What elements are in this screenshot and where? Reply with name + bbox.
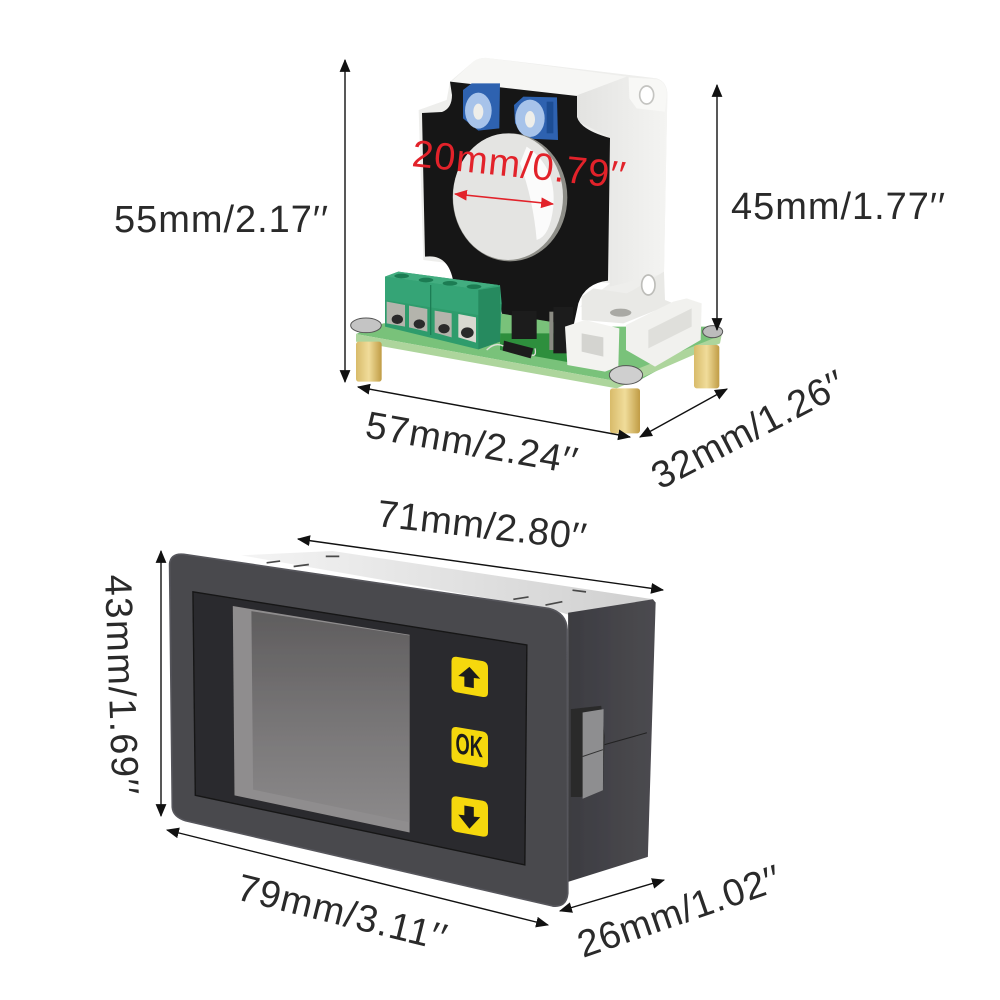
dimension: board length arrow [358,387,630,437]
down button [451,796,488,837]
dimension: board length label: 57mm/2.24′′ [362,405,580,483]
dimension: bezel width arrow [167,830,548,925]
dimension: board width label: 32mm/1.26′′ [645,363,852,498]
dimension: case depth label: 26mm/1.02′′ [572,858,786,967]
dimension: sensor height label: 55mm/2.17′′ [114,199,328,241]
LCD screen [233,606,410,833]
mounting screws [351,318,723,384]
black front face [422,82,610,357]
dimension: case depth-width arrow [298,539,663,590]
dimension: bezel height arrow [160,551,162,816]
dimension: case width label: 71mm/2.80′′ [375,493,588,559]
center hole [453,133,567,261]
right side of case [568,599,656,882]
dimension: hole diameter label: 20mm/0.79′′ [410,133,627,197]
dimension: hole diameter arrow [455,194,553,204]
green circuit board [356,313,722,388]
dimension: bezel width label: 79mm/3.11′′ [233,867,451,960]
dimension: housing height label: 45mm/1.77′′ [731,186,945,228]
green screw terminal block [385,272,502,349]
dimension: sensor height arrow [344,60,346,382]
dark window [193,592,527,865]
display meter photo [170,551,656,906]
up button [451,657,488,697]
top of case [241,551,653,614]
dimension: housing height arrow [716,85,718,330]
OK button: OK [456,728,483,765]
white sensor housing [419,58,673,323]
dimension: board width arrow [640,389,727,437]
side clip [571,706,647,799]
blue trimmer left [463,83,500,131]
white connectors [565,298,702,372]
dimension: bezel height label: 43mm/1.69′′ [96,574,146,795]
OK button [451,727,488,767]
blue trimmer right [514,97,558,140]
current sensor module photo [351,58,723,433]
brass standoffs [356,342,719,433]
dimension: case depth arrow [560,880,664,911]
front bezel [170,554,568,906]
black components and diode [487,307,573,358]
